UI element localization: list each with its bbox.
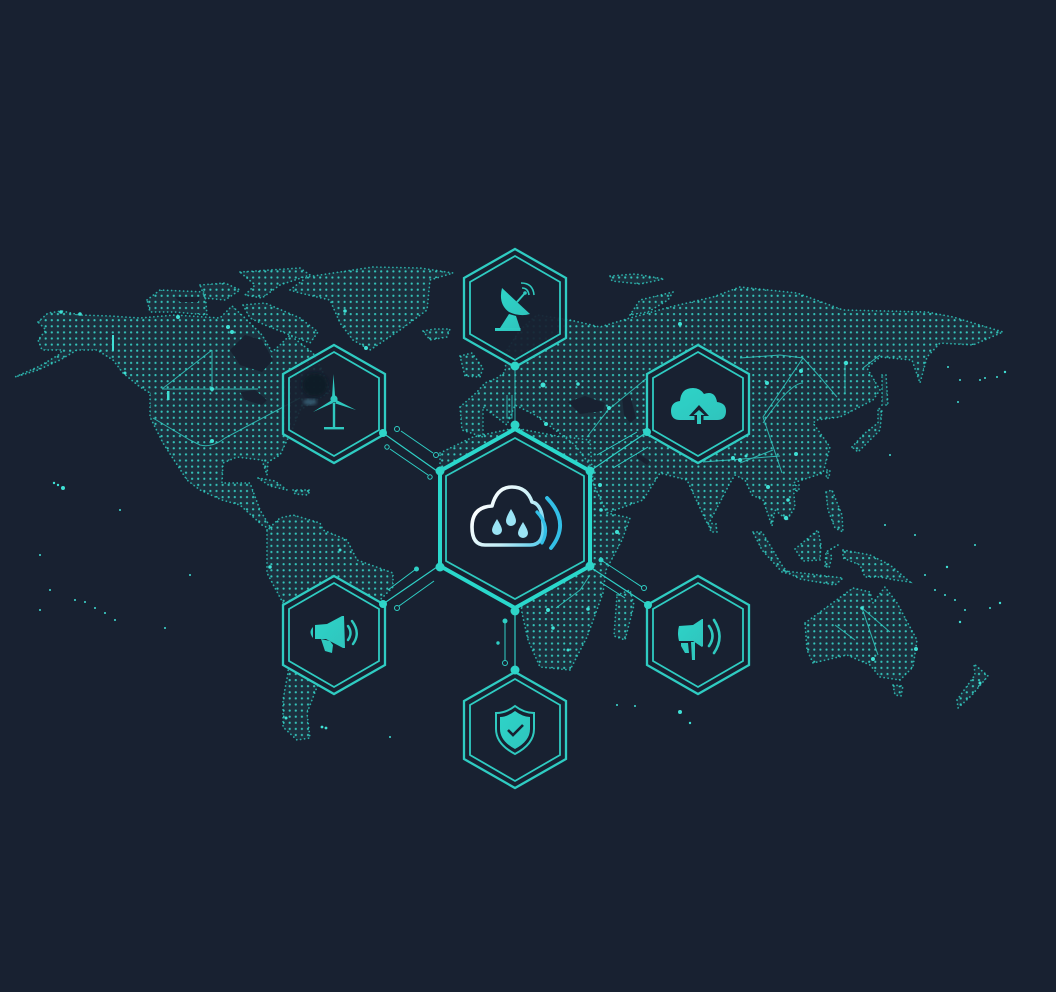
map bright nodes xyxy=(39,309,1006,738)
icon: cloud upload xyxy=(671,388,726,426)
connector: lower left xyxy=(383,567,437,610)
hexagon: upper left, wind turbine xyxy=(283,345,385,463)
connector lines xyxy=(383,366,648,670)
connector: lower right xyxy=(590,558,648,605)
icon: cloud with rain xyxy=(472,487,560,548)
map dotted coastlines xyxy=(15,267,1003,740)
hexagon: lower left, megaphone xyxy=(283,576,385,694)
dark storm blot near turbine xyxy=(302,373,328,405)
map land tint xyxy=(15,267,1003,740)
hexagon: bottom, shield xyxy=(464,672,566,788)
icon: shield check xyxy=(496,706,534,754)
connector nodes xyxy=(379,362,652,674)
connector: top xyxy=(507,366,515,425)
hexagon: upper right, cloud upload xyxy=(647,345,749,463)
connector: upper right xyxy=(590,432,648,471)
hexagon: top, satellite dish xyxy=(464,249,566,367)
map route lines xyxy=(153,350,890,655)
icon: satellite dish xyxy=(495,283,534,331)
hexagon: central cloud with rain and signal xyxy=(440,429,590,608)
icon: megaphone right xyxy=(678,619,720,660)
map dot grid xyxy=(15,267,1003,740)
world map xyxy=(15,267,1006,740)
hexagon: lower right, megaphone xyxy=(647,576,749,694)
icon: megaphone left xyxy=(310,616,357,653)
map inland seas xyxy=(175,297,650,465)
connector: upper left xyxy=(383,426,438,479)
connector: bottom xyxy=(497,610,515,670)
icon: wind turbine xyxy=(313,374,356,429)
